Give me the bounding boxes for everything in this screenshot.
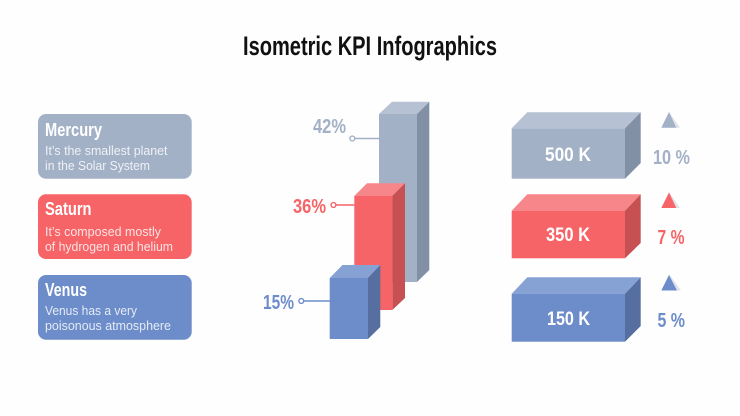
indicator: 5 % — [658, 274, 685, 332]
card: Venus: Venus — [45, 279, 87, 300]
block: 150 K — [512, 277, 641, 342]
bar: 42% — [379, 102, 429, 282]
card: Mercury: Mercury — [45, 119, 103, 140]
card: Saturn: It’s composed mostly — [45, 225, 162, 239]
label: 36%: 36% — [293, 196, 326, 218]
block: 350 K — [512, 194, 641, 258]
label: 15%: 15% — [263, 292, 294, 314]
block: 500 K — [512, 112, 641, 179]
chart: isometric bars — [263, 102, 429, 339]
indicator: 7 % — [658, 192, 685, 249]
card: Venus: poisonous atmosphere — [45, 319, 171, 333]
label: 42% — [313, 116, 379, 141]
card: Mercury: It’s the smallest planet — [45, 144, 168, 158]
card: Venus: Venus has a very — [45, 304, 138, 318]
bar: 15% — [330, 265, 380, 339]
label: 42%: 42% — [313, 116, 346, 138]
block: 150 K: 150 K — [547, 309, 590, 330]
card: Saturn: of hydrogen and helium — [45, 240, 173, 254]
card: Mercury — [38, 114, 192, 179]
bar: 36% — [354, 183, 405, 310]
label: 36% — [293, 196, 354, 218]
panel: KPI blocks — [512, 112, 690, 342]
block: 350 K: 350 K — [546, 225, 590, 246]
indicator: 5 %: 5 % — [658, 310, 685, 332]
indicator: 10 %: 10 % — [653, 147, 690, 169]
card: Saturn — [38, 194, 192, 259]
indicator: 10 % — [653, 112, 690, 169]
label: 15% — [263, 292, 330, 314]
card: Venus — [38, 275, 192, 340]
title: Isometric KPI Infographics — [243, 31, 497, 61]
card: Saturn: Saturn — [45, 198, 92, 219]
card: Mercury: in the Solar System — [45, 159, 150, 173]
block: 500 K: 500 K — [545, 145, 591, 166]
panel: text cards — [38, 114, 192, 340]
indicator: 7 %: 7 % — [658, 227, 685, 249]
